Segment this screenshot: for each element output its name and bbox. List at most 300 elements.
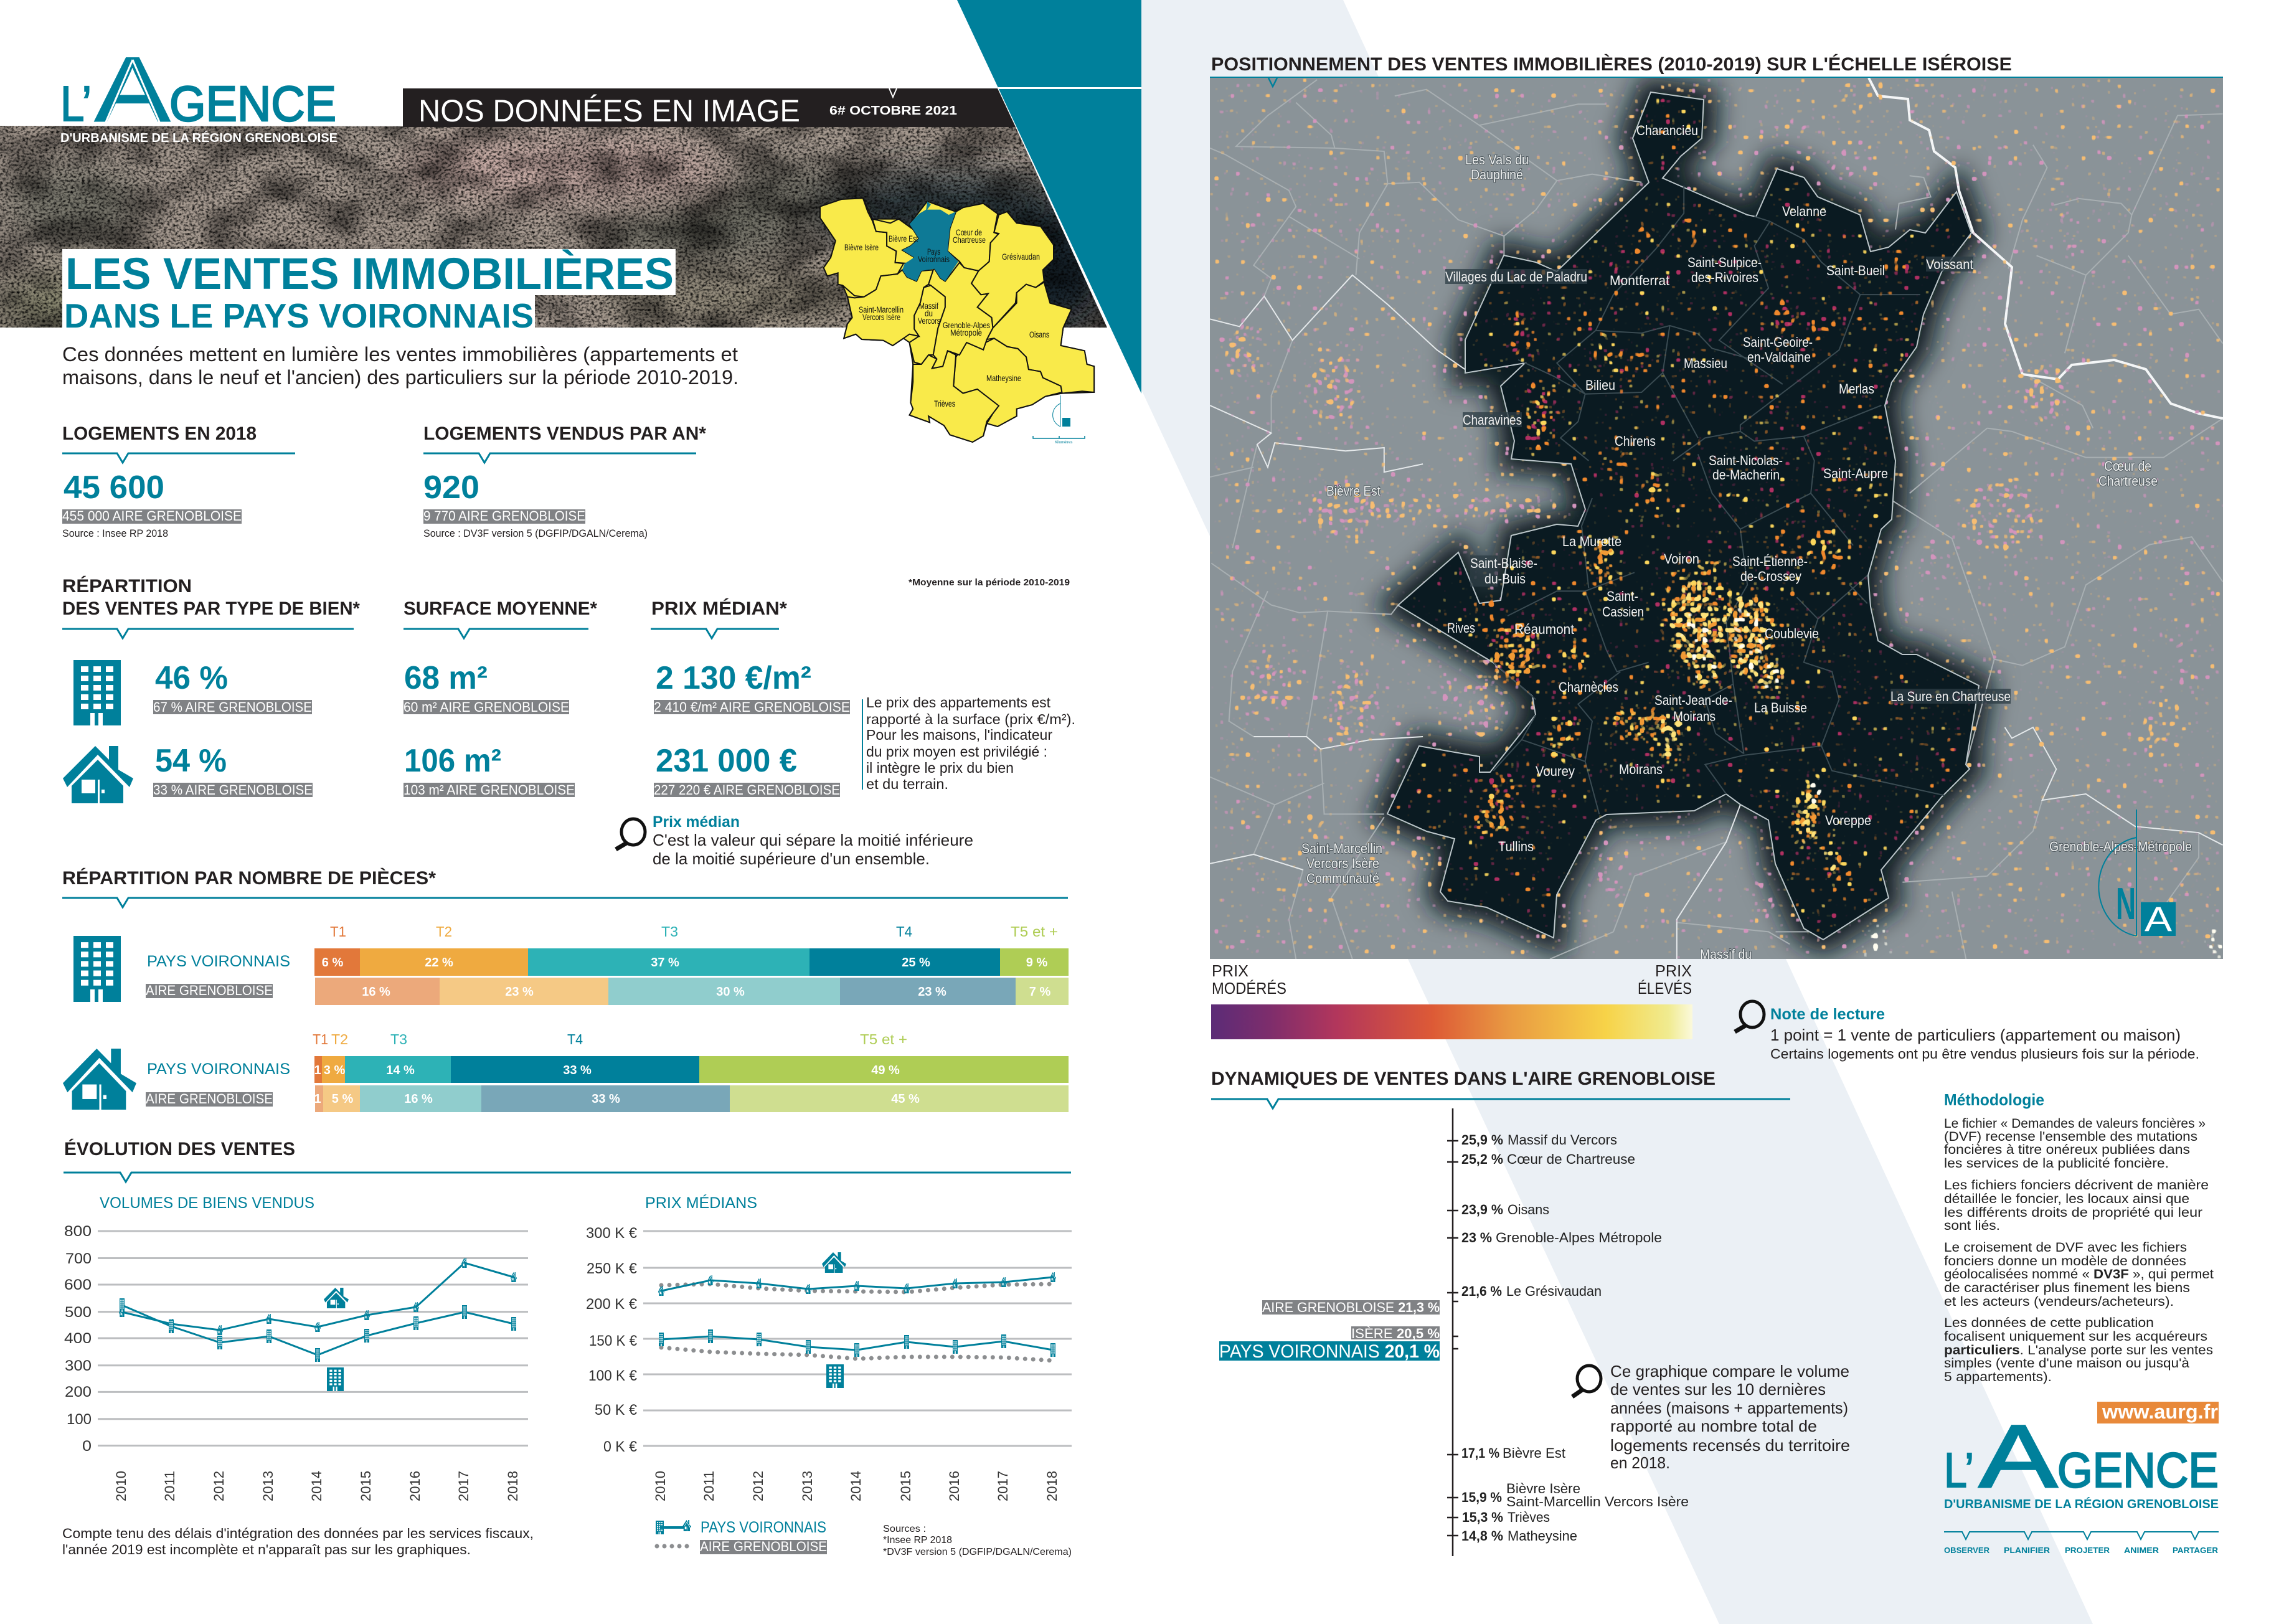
apartments surface: 68 m² (404, 660, 488, 696)
stacked bar: apartments Aire grenobloise: 23 % (505, 985, 534, 999)
map labels inside territory: Cassien (1602, 604, 1644, 620)
sales dots: orange (1387, 92, 1979, 940)
chart: prix médians: 0 K € (603, 1438, 638, 1455)
axis entries: 25,2 % (1461, 1151, 1503, 1167)
icon: house key (324, 1288, 349, 1308)
locator map labels (844, 227, 1049, 408)
chart: prix médians: 250 K € (587, 1260, 638, 1277)
legend: price scale (1211, 961, 1692, 1039)
stat: logements en 2018: LOGEMENTS EN 2018 (62, 423, 257, 444)
callout: prix médian: de la moitié supérieure d'un ensemble. (653, 849, 930, 868)
map labels inside territory: Vourey (1536, 763, 1575, 779)
legend (656, 1519, 827, 1554)
axis entries: Matheysine (1508, 1528, 1577, 1544)
axis entries: Trièves (1508, 1509, 1550, 1525)
map labels inside territory: des-Rivoires (1691, 270, 1758, 285)
year axis: 2017 (456, 1471, 471, 1501)
map labels outside territory: Dauphiné (1471, 167, 1523, 182)
apartments price (654, 660, 850, 715)
stacked bar: houses Aire grenobloise (314, 1085, 1069, 1112)
apartments surface: 60 m² AIRE GRENOBLOISE (404, 699, 569, 715)
map labels outside territory: Chartreuse (2098, 473, 2158, 489)
value: 45 600 (64, 470, 164, 506)
chart: volumes de biens vendus: 500 (65, 1304, 92, 1321)
houses share: 54 % (155, 743, 227, 779)
north arrow logo: A (2145, 899, 2173, 938)
méthodologie text: Les données de cette publication (1944, 1316, 2154, 1330)
chart explanation (1610, 1362, 1850, 1472)
column labels houses: T2 (331, 1031, 348, 1047)
map labels inside territory: en-Valdaine (1747, 349, 1811, 365)
sales dots: yellow (1387, 92, 1979, 940)
stat: logements vendus par an: LOGEMENTS VENDUS PAR AN* (423, 423, 706, 444)
panel: répartition par nombre de pièces (62, 867, 1069, 1112)
sales dots: dense cores, orange (1476, 540, 1821, 845)
intro text: Ces données mettent en lumière les ventes immobilières (appartements et (62, 343, 738, 366)
icon: apartment building (73, 936, 121, 1002)
price note: rapporté à la surface (prix €/m²). (866, 711, 1075, 727)
méthodologie text: Le croisement de DVF avec les fichiers (1944, 1240, 2187, 1255)
logo top-left: A (95, 39, 170, 140)
axis entries: Bièvre Isère (1506, 1481, 1580, 1496)
méthodologie text: fonciers donne un modèle de données (1944, 1254, 2186, 1268)
map labels outside territory: Cœur de (2104, 458, 2151, 474)
locator map labels: Grenoble-Alpes (943, 320, 990, 330)
chart note (62, 1526, 534, 1557)
locator map labels: Oisans (1029, 329, 1049, 339)
year axis: 2015 (358, 1471, 374, 1501)
axis entries: 25,9 % (1461, 1132, 1503, 1148)
main title (62, 249, 676, 335)
column labels houses: T3 (390, 1031, 407, 1047)
map labels inside territory: Chirens (1615, 433, 1656, 449)
callout: prix médian: Prix médian (653, 813, 740, 831)
map labels inside territory: Saint-Étienne- (1732, 554, 1808, 569)
méthodologie text: les services de la publicité foncière. (1944, 1156, 2169, 1171)
logo verbs: PROJETER (2065, 1546, 2110, 1555)
axis entries: 17,1 % (1461, 1445, 1499, 1461)
icon: magnifier (616, 819, 645, 849)
column labels houses: T1 (313, 1031, 328, 1047)
markers (119, 1258, 517, 1362)
label Pays Voironnais: PAYS VOIRONNAIS (147, 953, 290, 970)
chart: prix médians: 150 K € (589, 1333, 638, 1349)
legend: price scale: ÉLEVÉS (1638, 979, 1692, 998)
territory (1387, 92, 1979, 940)
map labels inside territory: Charnècles (1559, 679, 1618, 695)
map labels inside territory: du-Buis (1484, 571, 1526, 587)
column labels houses (313, 1031, 907, 1047)
stacked bar: houses Aire grenobloise: 45 % (891, 1092, 920, 1106)
map labels inside territory: La Sure en Chartreuse (1890, 689, 2011, 704)
intro text: maisons, dans le neuf et l'ancien) des particuliers sur la période 2010-2019. (62, 366, 739, 389)
column labels apartments: T1 (330, 923, 346, 940)
locator map labels: Cœur de (956, 227, 982, 237)
axis entries: 23 % (1461, 1230, 1492, 1245)
callout: prix médian: C'est la valeur qui sépare la moitié inférieure (653, 831, 973, 849)
chart: prix médians: 200 K € (586, 1296, 638, 1313)
source: Source : DV3F version 5 (DGFIP/DGALN/Cerema) (423, 527, 648, 539)
note: moyenne: *Moyenne sur la période 2010-2019 (909, 577, 1070, 588)
logo bottom-right: A (1979, 1407, 2058, 1506)
locator map labels: Pays (927, 247, 940, 257)
map labels inside territory: Rives (1447, 620, 1475, 636)
locator map labels: Voironnais (918, 254, 950, 264)
stacked bar: apartments Aire grenobloise: 7 % (1029, 985, 1050, 999)
icon: house (63, 746, 133, 803)
callout: prix médian (653, 813, 973, 868)
white dots south-east of Voreppe (1859, 913, 2230, 966)
map heading rule (1210, 77, 2223, 87)
line: apartments volumes (122, 1305, 514, 1355)
axis entries: Saint-Marcellin Vercors Isère (1506, 1494, 1689, 1509)
locator map of Isère (820, 198, 1094, 445)
main title: LES VENTES IMMOBILIÈRES (65, 250, 674, 299)
locator map labels: Métropole (950, 328, 982, 338)
panel: surface moyenne: SURFACE MOYENNE* (404, 598, 597, 619)
map labels inside territory: Charancieu (1636, 123, 1698, 138)
axis entries: Le Grésivaudan (1506, 1283, 1602, 1299)
houses price: 227 220 € AIRE GRENOBLOISE (654, 782, 840, 798)
panel: répartition par type de bien: DES VENTES PAR TYPE DE BIEN* (62, 598, 360, 619)
stacked bar: houses Pays Voironnais: 49 % (871, 1064, 900, 1077)
logo verbs: PARTAGER (2173, 1546, 2219, 1555)
price note: Pour les maisons, l'indicateur (866, 727, 1052, 743)
logo top-left: GENCE (169, 76, 336, 131)
year axis: 2018 (505, 1471, 521, 1501)
price note: et du terrain. (866, 776, 948, 792)
year axis: 2015 (898, 1471, 913, 1501)
note de lecture: Certains logements ont pu être vendus plusieurs fois sur la période. (1770, 1046, 2199, 1062)
locator map labels: Massif (919, 301, 938, 311)
locator map labels: Bièvre Isère (844, 242, 879, 252)
price note: du prix moyen est privilégié : (866, 744, 1047, 760)
teal corner shape (957, 0, 1141, 394)
axis entries: Oisans (1508, 1202, 1549, 1217)
dotted lines: Aire grenobloise (661, 1284, 1053, 1361)
icon: building key (826, 1364, 844, 1388)
map labels outside territory: Les Vals du (1465, 152, 1529, 168)
label Aire grenobloise: AIRE GRENOBLOISE (146, 983, 273, 998)
north arrow logo: N (2116, 879, 2136, 929)
icon: building key (327, 1367, 344, 1391)
locator north arrow and scale (1033, 395, 1085, 445)
stacked bar: houses Aire grenobloise: 1 (314, 1092, 321, 1106)
column labels apartments: T5 et + (1011, 923, 1058, 940)
north arrow logo (2098, 810, 2176, 938)
map labels inside territory: de-Crossey (1740, 569, 1801, 584)
map labels inside territory: Charavines (1463, 412, 1522, 428)
chart: volumes de biens vendus: 400 (64, 1330, 92, 1347)
axis entries: Grenoble-Alpes Métropole (1496, 1230, 1662, 1245)
panel: répartition par type de bien (62, 575, 360, 803)
panel: surface moyenne (404, 598, 597, 798)
logo verbs: ANIMER (2124, 1546, 2159, 1555)
méthodologie text: focalisent uniquement sur les acquéreurs (1944, 1329, 2207, 1344)
apartments price: 2 410 €/m² AIRE GRENOBLOISE (654, 699, 850, 715)
map labels inside territory: Velanne (1782, 204, 1826, 219)
internal commune boundaries (1493, 186, 1945, 814)
map labels inside territory (1445, 123, 2011, 854)
logo subtitle: D'URBANISME DE LA RÉGION GRENOBLOISE (1944, 1497, 2219, 1511)
chart note: l'année 2019 est incomplète et n'apparaît pas sur les graphiques. (62, 1542, 471, 1557)
axis entries: 15,3 % (1462, 1509, 1503, 1525)
locator map labels: Saint-Marcellin (859, 304, 904, 314)
comparison tag: 9 770 AIRE GRENOBLOISE (423, 508, 585, 524)
issue number: 6# OCTOBRE 2021 (829, 104, 957, 118)
map labels inside territory: de-Macherin (1712, 467, 1780, 483)
map labels outside territory (1301, 152, 2192, 962)
chart: volumes de biens vendus (64, 1194, 528, 1501)
icon: magnifier (1735, 1001, 1764, 1032)
méthodologie text: sont liés. (1944, 1219, 2000, 1233)
logo bottom-right: GENCE (2057, 1442, 2219, 1498)
méthodologie text: Les fichiers fonciers décrivent de manière (1944, 1178, 2209, 1192)
value: 920 (423, 470, 479, 506)
year axis: 2012 (750, 1471, 766, 1501)
panel: prix médian: PRIX MÉDIAN* (651, 598, 787, 619)
stacked bar: houses Pays Voironnais (314, 1056, 1069, 1083)
locator map labels: du (925, 308, 933, 318)
website tag: www.aurg.fr (2102, 1400, 2218, 1423)
map labels inside territory: Saint-Geoire- (1743, 334, 1813, 350)
map labels inside territory: Saint-Blaise- (1470, 555, 1537, 571)
logo bottom-right (1944, 1407, 2219, 1555)
header photo: aerial view of Voiron (0, 121, 1121, 336)
axis (1447, 1108, 1458, 1556)
sales dots: dense cores, yellow (1654, 576, 1841, 879)
locator map labels: Chartreuse (953, 235, 986, 245)
year axis: 2012 (211, 1471, 227, 1501)
panel: répartition par type de bien: RÉPARTITION (62, 575, 192, 597)
year axis (653, 1471, 1060, 1501)
map labels inside territory: Coublevie (1765, 626, 1819, 641)
label Aire grenobloise: AIRE GRENOBLOISE (146, 1091, 273, 1107)
logo rule with chevrons (1944, 1532, 2219, 1539)
locator map labels: Vercors Isère (862, 312, 900, 322)
map: sales positioning at Isère scale (1210, 74, 2230, 966)
year axis: 2013 (800, 1471, 815, 1501)
icon: apartment building (73, 660, 121, 725)
stacked bar: apartments Pays Voironnais: 6 % (322, 956, 343, 970)
panel: évolution des ventes (62, 1138, 1072, 1557)
sales dots: magenta (1387, 92, 1979, 940)
sources: *Insee RP 2018 (883, 1535, 952, 1546)
price note: il intègre le prix du bien (866, 760, 1014, 776)
chart: prix médians (586, 1194, 1072, 1501)
stacked bar: apartments Aire grenobloise: 16 % (362, 985, 390, 999)
chart: volumes de biens vendus: 0 (82, 1438, 92, 1455)
map labels inside territory: Moirans (1673, 709, 1716, 724)
stacked bar: apartments Pays Voironnais: 9 % (1026, 956, 1047, 970)
chart: volumes de biens vendus: 100 (67, 1411, 92, 1428)
apartments share (153, 660, 312, 715)
column labels apartments: T3 (661, 923, 678, 940)
sales dots: white high prices (1674, 598, 1829, 808)
map labels inside territory: Saint-Nicolas- (1709, 453, 1783, 468)
panel: évolution des ventes: ÉVOLUTION DES VENTES (64, 1138, 295, 1159)
méthodologie text: 5 appartements). (1944, 1370, 2052, 1384)
map labels inside territory: Bilieu (1585, 377, 1615, 393)
sources: Sources : (883, 1524, 926, 1534)
column labels apartments: T4 (896, 923, 912, 940)
logo verbs: OBSERVER (1944, 1546, 1990, 1555)
legend: price scale: PRIX (1212, 961, 1248, 980)
stacked bar: houses Pays Voironnais: 14 % (386, 1064, 415, 1077)
chart: prix médians: PRIX MÉDIANS (645, 1194, 757, 1212)
year axis: 2010 (653, 1471, 668, 1501)
chart explanation: années (maisons + appartements) (1610, 1399, 1848, 1417)
note de lecture: Note de lecture (1770, 1006, 1885, 1023)
chart explanation: Ce graphique compare le volume (1610, 1362, 1849, 1381)
méthodologie text: de caractériser plus finement les biens (1944, 1281, 2190, 1295)
map labels outside territory: Bièvre Est (1326, 483, 1380, 499)
page background stripe (1141, 0, 2093, 1624)
apartments surface (404, 660, 569, 715)
label backgrounds (1445, 257, 2011, 704)
tag: isère: ISÈRE 20,5 % (1351, 1326, 1440, 1341)
méthodologie text: et les acteurs (vendeurs/acheteurs). (1944, 1295, 2174, 1309)
stacked bar: apartments Aire grenobloise: 30 % (716, 985, 745, 999)
external boundary lines (1210, 80, 2223, 959)
méthodologie text: géolocalisées nommé « DV3F », qui permet (1944, 1267, 2214, 1282)
map labels outside territory: Saint-Marcellin (1301, 841, 1382, 856)
map labels inside territory: Saint-Bueil (1826, 263, 1885, 278)
chart: prix médians: 300 K € (586, 1225, 638, 1242)
map labels inside territory: Tullins (1498, 839, 1534, 854)
apartments share: 46 % (155, 660, 228, 696)
locator map labels: Trièves (934, 399, 955, 408)
map labels inside territory: Merlas (1839, 381, 1874, 397)
chart: volumes de biens vendus: 600 (64, 1277, 92, 1293)
stat: logements vendus par an (423, 423, 706, 539)
black banner (403, 88, 1016, 128)
axis entries (1461, 1132, 1689, 1544)
sources (883, 1524, 1072, 1557)
map labels outside territory: Communauté (1306, 871, 1379, 886)
chart note: Compte tenu des délais d'intégration des données par les services fiscaux, (62, 1526, 534, 1541)
year axis: 2016 (407, 1471, 423, 1501)
chart: volumes de biens vendus: VOLUMES DE BIENS VENDUS (100, 1194, 314, 1212)
chart explanation: logements recensés du territoire (1610, 1436, 1850, 1455)
intro text (62, 343, 739, 389)
chart: volumes de biens vendus: 300 (65, 1357, 92, 1374)
axis entries: 21,6 % (1461, 1283, 1502, 1299)
stacked bar: apartments Pays Voironnais: 37 % (651, 956, 679, 970)
year axis: 2011 (162, 1471, 177, 1501)
map labels outside territory: Massif du (1700, 947, 1752, 962)
thick white boundary (1869, 78, 2223, 418)
panel: dynamiques de ventes (1211, 1069, 1850, 1556)
apartments price: 2 130 €/m² (656, 660, 811, 696)
stacked bar: apartments Pays Voironnais: 22 % (425, 956, 453, 970)
year axis: 2011 (701, 1471, 717, 1501)
panel: dynamiques de ventes: DYNAMIQUES DE VENTES DANS L'AIRE GRENOBLOISE (1211, 1069, 1716, 1089)
price note (862, 694, 1075, 792)
locator map labels: Matheysine (986, 373, 1021, 383)
panel: prix médian (651, 598, 1075, 798)
map labels inside territory: Voissant (1926, 257, 1973, 272)
year axis: 2014 (848, 1471, 864, 1501)
map labels inside territory: Saint-Aupre (1823, 466, 1888, 481)
locator map labels: Bièvre Est (889, 234, 918, 243)
legend: AIRE GRENOBLOISE (700, 1539, 827, 1554)
chart: prix médians: 100 K € (588, 1367, 638, 1384)
territory glow (1387, 92, 1979, 940)
stacked bar: houses Pays Voironnais: 3 % (324, 1064, 345, 1077)
banner title: NOS DONNÉES EN IMAGE (418, 93, 800, 128)
year axis (113, 1471, 521, 1501)
pale sales dots outside territory: pink (1210, 78, 2223, 959)
houses price: 231 000 € (656, 743, 797, 779)
houses surface (404, 743, 575, 798)
stacked bar: houses Pays Voironnais: 1 (314, 1064, 321, 1077)
stacked bar: houses Pays Voironnais: 33 % (563, 1064, 592, 1077)
icon: magnifier (1572, 1366, 1601, 1397)
stacked bar: houses Aire grenobloise: 33 % (592, 1092, 620, 1106)
stat: logements en 2018 (62, 423, 295, 539)
chart: volumes de biens vendus: 800 (64, 1223, 92, 1240)
logo bottom-right: L’ (1944, 1442, 1974, 1498)
axis entries: 15,9 % (1461, 1489, 1502, 1505)
logo verbs: PLANIFIER (2004, 1546, 2051, 1555)
year axis: 2010 (113, 1471, 129, 1501)
map labels outside territory: Grenoble-Alpes-Métropole (2049, 839, 2192, 854)
tag: aire grenobloise: AIRE GRENOBLOISE 21,3 % (1262, 1300, 1440, 1315)
chart explanation: en 2018. (1610, 1453, 1670, 1472)
stacked bar: houses Aire grenobloise: 16 % (404, 1092, 433, 1106)
méthodologie text: particuliers . L'analyse porte sur les ventes (1944, 1343, 2213, 1357)
year axis: 2017 (995, 1471, 1011, 1501)
axis entries: 23,9 % (1461, 1202, 1503, 1217)
column labels houses: T5 et + (860, 1031, 907, 1047)
chart explanation: rapporté au nombre total de (1610, 1417, 1817, 1435)
panel: méthodologie (1944, 1090, 2214, 1384)
gradient bar (1211, 1004, 1692, 1039)
axis entries: 14,8 % (1461, 1528, 1503, 1544)
houses surface: 103 m² AIRE GRENOBLOISE (404, 782, 575, 798)
méthodologie text: foncières à titre onéreux publiées dans (1944, 1143, 2190, 1157)
map labels inside territory: Voiron (1664, 551, 1699, 567)
axis entries: Massif du Vercors (1508, 1132, 1617, 1148)
column labels houses: T4 (567, 1031, 583, 1047)
panel: répartition par nombre de pièces: RÉPARTITION PAR NOMBRE DE PIÈCES* (62, 867, 436, 889)
logo verbs (1944, 1546, 2219, 1555)
méthodologie text: les différents droits de propriété qui leur (1944, 1206, 2202, 1220)
stacked bar: apartments Aire grenobloise (315, 978, 1069, 1005)
map heading: POSITIONNEMENT DES VENTES IMMOBILIÈRES (2010-2019) SUR L'ÉCHELLE ISÉROISE (1211, 54, 2012, 75)
pale sales dots outside territory: peach (1210, 74, 2223, 959)
map labels inside territory: La Buisse (1754, 700, 1807, 715)
méthodologie text: (DVF) recense l'ensemble des mutations (1944, 1130, 2197, 1144)
comparison tag: 455 000 AIRE GRENOBLOISE (62, 508, 242, 524)
chart explanation: de ventes sur les 10 dernières (1610, 1380, 1826, 1399)
panel: méthodologie: Méthodologie (1944, 1090, 2044, 1109)
houses price (654, 743, 840, 798)
map labels inside territory: La Murette (1562, 534, 1621, 549)
chart: volumes de biens vendus: 700 (65, 1250, 92, 1267)
markers (658, 1272, 1056, 1357)
méthodologie text: Le fichier « Demandes de valeurs foncières » (1944, 1116, 2206, 1131)
year axis: 2013 (260, 1471, 276, 1501)
tag: pays voironnais: PAYS VOIRONNAIS 20,1 % (1219, 1341, 1440, 1362)
stacked bar: apartments Pays Voironnais: 25 % (902, 956, 930, 970)
map labels inside territory: Villages du Lac de Paladru (1445, 269, 1587, 285)
map labels inside territory: Saint-Sulpice- (1687, 255, 1762, 270)
map labels inside territory: Moirans (1619, 762, 1663, 777)
logo top-left: L’ (60, 76, 92, 131)
houses share (153, 743, 313, 798)
